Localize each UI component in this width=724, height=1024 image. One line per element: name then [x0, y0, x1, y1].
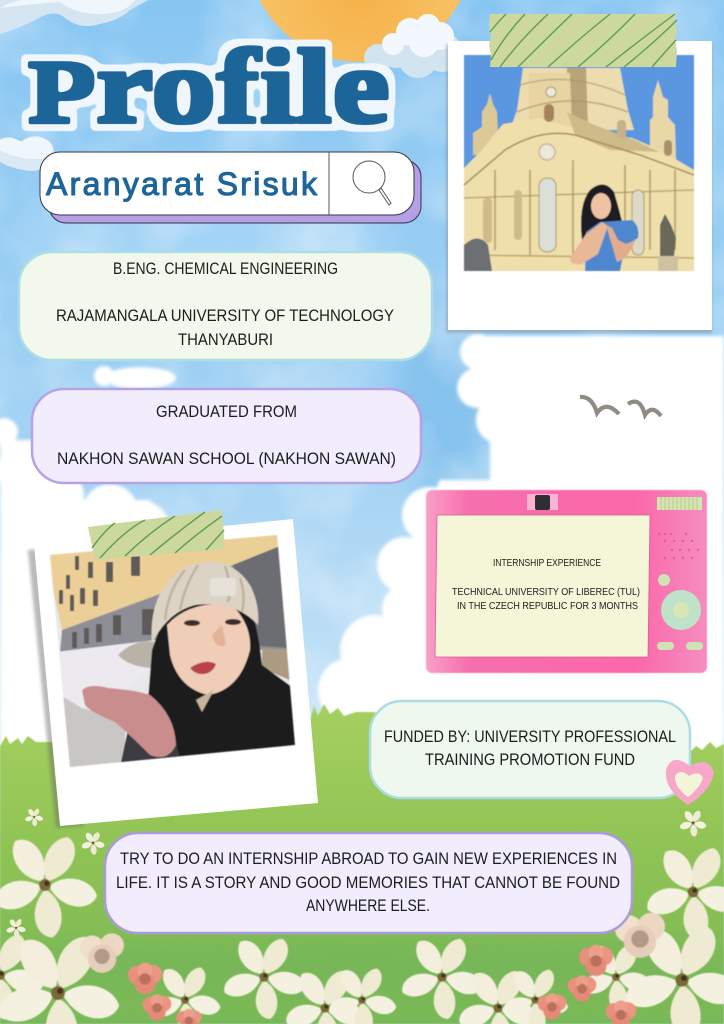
- panel: education: B.ENG. CHEMICAL ENGINEERING: [113, 260, 338, 278]
- church dome: [510, 68, 634, 130]
- church towers: [473, 93, 500, 155]
- tape: [489, 14, 677, 67]
- title: Profile: [28, 28, 390, 145]
- hair and coat: [120, 600, 296, 767]
- panel: advice: ANYWHERE ELSE.: [306, 897, 430, 915]
- panel: advice: TRY TO DO AN INTERNSHIP ABROAD TO GAIN NEW EXPERIENCES IN: [120, 850, 617, 868]
- viewfinder grille: [657, 497, 702, 510]
- glove: [82, 686, 176, 757]
- tape: [88, 510, 225, 560]
- panel: school: [32, 389, 421, 483]
- photo: snow polaroid: [28, 510, 318, 828]
- panel: school: NAKHON SAWAN SCHOOL (NAKHON SAWAN): [57, 450, 396, 468]
- camera: INTERNSHIP EXPERIENCE: [493, 558, 601, 569]
- control buttons: [658, 574, 670, 586]
- panel: education: THANYABURI: [178, 331, 273, 349]
- screen: [435, 515, 650, 657]
- lens: [527, 494, 558, 510]
- left cloud by search bar: [0, 136, 54, 171]
- speaker dots: [658, 533, 699, 559]
- name: Aranyarat Srisuk: [46, 166, 318, 202]
- beanie: [152, 562, 258, 643]
- statue: [660, 214, 676, 256]
- birds: [580, 397, 661, 416]
- tree: [464, 238, 492, 271]
- search bar: [40, 152, 421, 223]
- church body: [464, 118, 694, 271]
- camera: IN THE CZECH REPUBLIC FOR 3 MONTHS: [457, 601, 638, 612]
- panel: advice: [105, 833, 632, 933]
- panel: education: [19, 252, 432, 360]
- top left cloud: [0, 0, 148, 34]
- flower meadow: [0, 832, 724, 1024]
- panel: funding: [370, 701, 690, 798]
- icon: heart: [666, 760, 714, 805]
- grass field: [0, 704, 724, 1024]
- cloud by sun: [364, 14, 462, 78]
- camera: TECHNICAL UNIVERSITY OF LIBEREC (TUL): [452, 587, 640, 598]
- small white flowers: [6, 808, 707, 938]
- grey wall: [60, 546, 292, 652]
- photo: church polaroid: [446, 14, 712, 333]
- face: [167, 604, 250, 695]
- panel: funding: TRAINING PROMOTION FUND: [425, 751, 635, 769]
- person: [581, 184, 624, 255]
- camera: [426, 490, 707, 673]
- snow ground: [60, 640, 156, 652]
- sun: [248, 0, 472, 62]
- icon: magnifying glass: [353, 161, 391, 205]
- panel: education: RAJAMANGALA UNIVERSITY OF TECHNOLOGY: [56, 307, 394, 325]
- beige wall: [45, 530, 280, 630]
- panel: advice: LIFE. IT IS A STORY AND GOOD MEMORIES THAT CANNOT BE FOUND: [116, 874, 620, 892]
- white clouds: [0, 334, 724, 760]
- panel: funding: FUNDED BY: UNIVERSITY PROFESSIONAL: [384, 728, 676, 746]
- panel: school: GRADUATED FROM: [156, 403, 297, 421]
